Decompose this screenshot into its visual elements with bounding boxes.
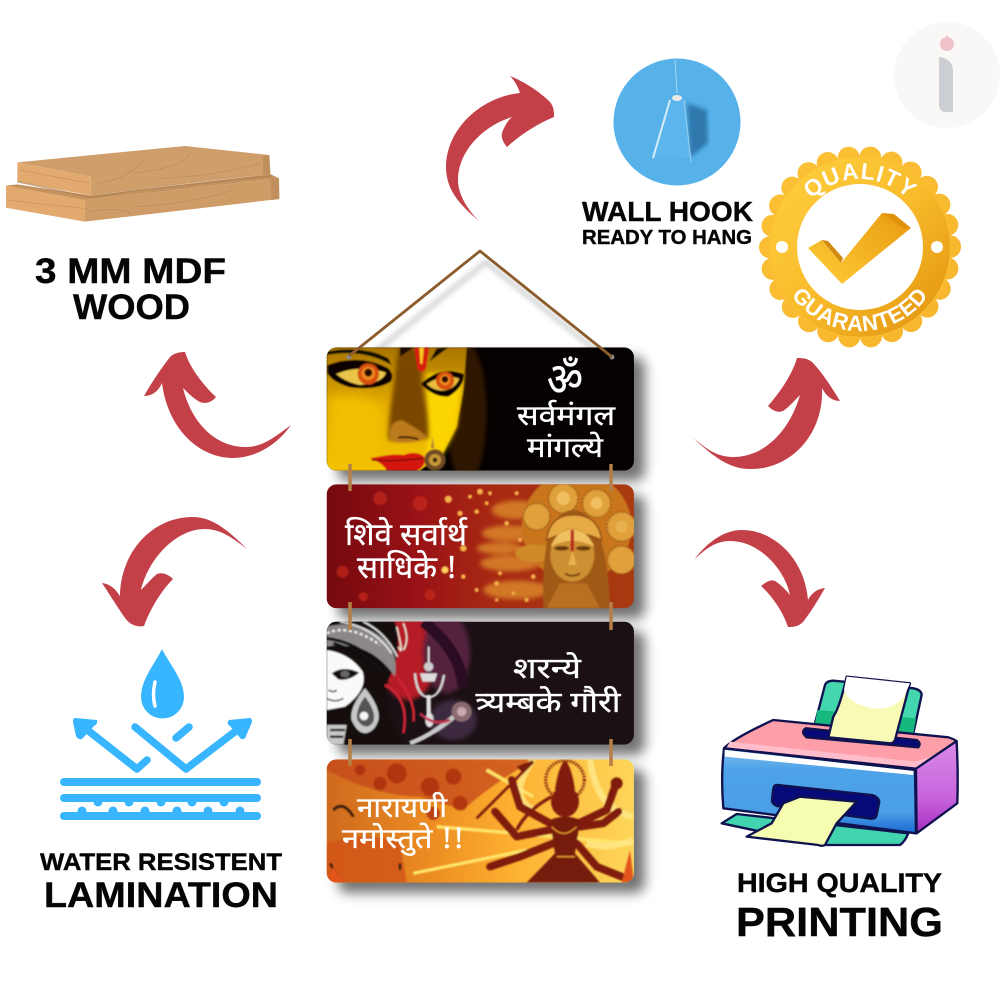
panel: durga face with sarvamangal text: ॐ [547, 354, 583, 414]
heading: high quality printing: PRINTING [736, 899, 943, 945]
heading: water resistent lamination: WATER RESISTENT [40, 849, 282, 876]
rope: hanger [349, 251, 612, 357]
icon: wooden planks [6, 146, 279, 222]
panel: golden goddess with shive sarvarth text: साधिके ! [357, 550, 457, 591]
panel: golden goddess with shive sarvarth text [327, 472, 636, 608]
icon: quality guaranteed seal: GUARANTEED [794, 289, 925, 332]
panel: orange goddess silhouette with narayani text: नारायणी [357, 791, 448, 829]
heading: high quality printing: HIGH QUALITY [737, 868, 942, 898]
heading: high quality printing [736, 868, 943, 945]
heading: wall hook: READY TO HANG [582, 227, 752, 249]
arrow: to water icon [102, 517, 247, 626]
arrow: to seal [693, 358, 840, 469]
icon: quality guaranteed seal: QUALITY [804, 163, 918, 196]
panel: durga face with sarvamangal text [326, 347, 634, 471]
icon: quality guaranteed seal [759, 146, 961, 348]
heading: wall hook: WALL HOOK [582, 196, 753, 227]
heading: water resistent lamination: LAMINATION [44, 876, 278, 915]
heading: water resistent lamination [40, 849, 282, 915]
panel: orange goddess silhouette with narayani text: नमोस्तुते !! [342, 822, 464, 860]
shadow: rope [358, 262, 618, 368]
panel: durga face with sarvamangal text: मांगल्ये [527, 431, 604, 469]
icon: printer [722, 677, 958, 846]
panel: durga face with sarvamangal text: सर्वमंगल [517, 399, 616, 437]
panel: black and white goddess with sharanye text: त्र्यम्बके गौरी [476, 686, 621, 724]
panel: black and white goddess with sharanye text [327, 613, 634, 745]
icon: water resistant droplet [64, 649, 257, 816]
arrow: to wall hook [446, 76, 554, 221]
icon: wall hook [614, 58, 740, 186]
panel: orange goddess silhouette with narayani text [327, 759, 634, 883]
heading: 3 mm mdf wood: 3 MM MDF [35, 252, 226, 291]
arrow: to printer [694, 530, 825, 627]
panel: golden goddess with shive sarvarth text: शिवे सर्वार्थ [345, 517, 468, 558]
strings: panel connectors [350, 464, 611, 766]
heading: 3 mm mdf wood: WOOD [73, 288, 190, 327]
icon: brand logo [894, 22, 1000, 128]
arrow: to wood [144, 352, 291, 458]
panel: black and white goddess with sharanye text: शरन्ये [513, 652, 582, 690]
heading: wall hook [582, 196, 753, 249]
heading: 3 mm mdf wood [35, 252, 226, 327]
shadow: hanging panels [338, 357, 645, 893]
